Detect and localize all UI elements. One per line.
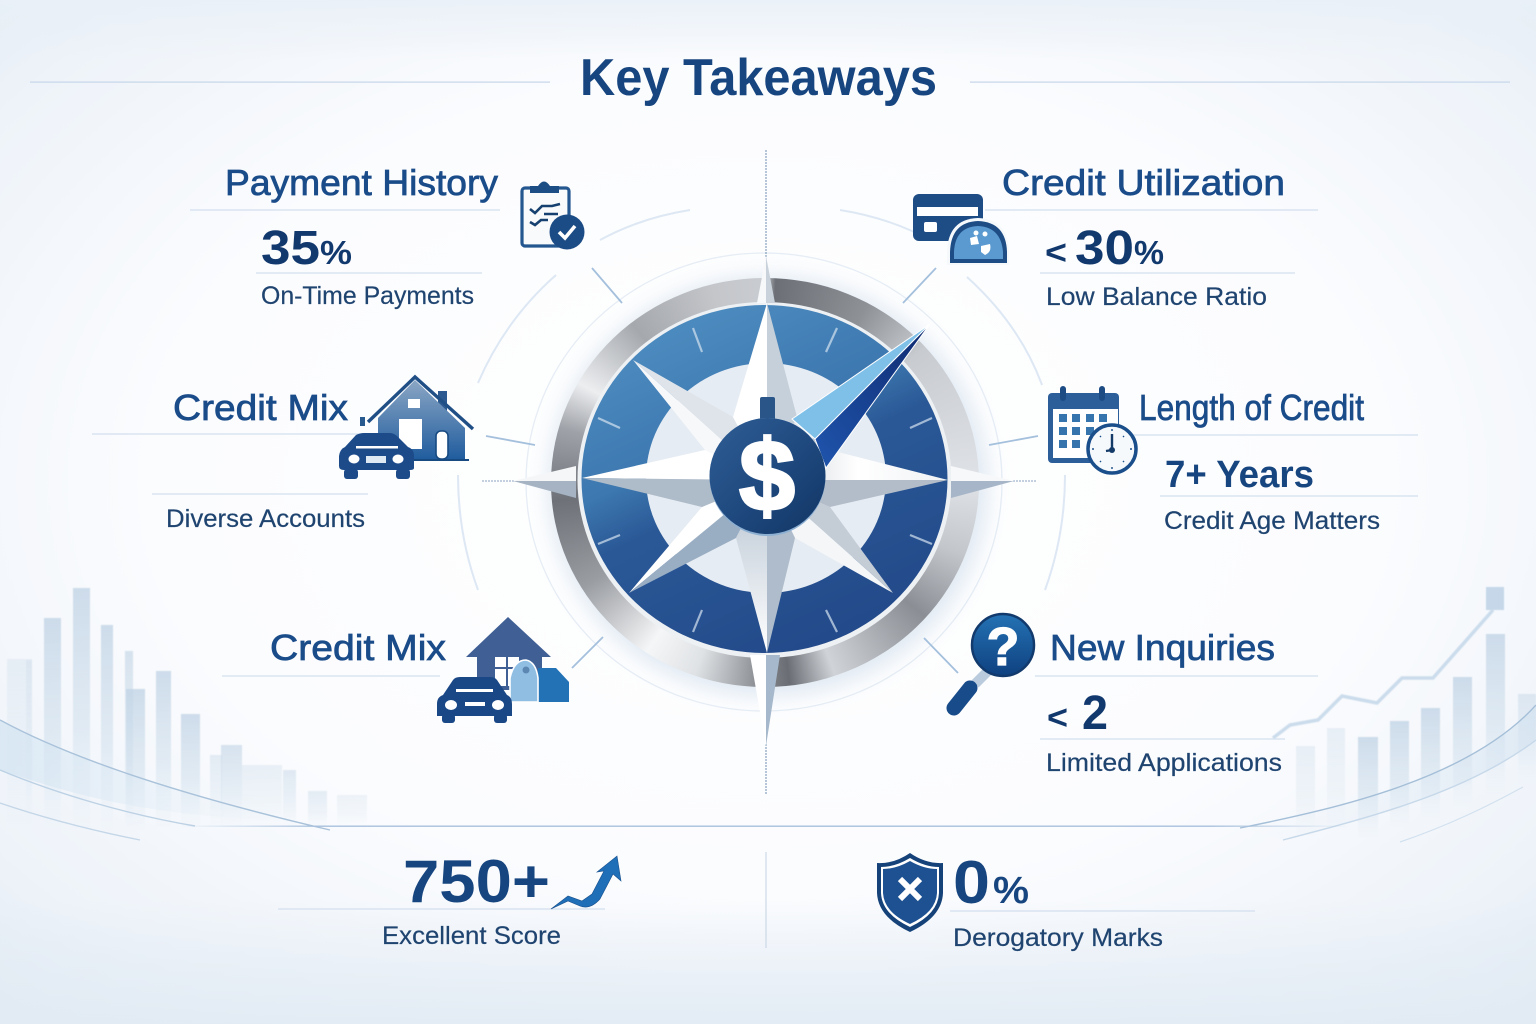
panel: credit mix upper: Diverse Accounts bbox=[166, 505, 365, 533]
panel: new inquiries: Limited Applications bbox=[1046, 749, 1282, 777]
icon: house, car, lock and folder bbox=[437, 617, 569, 723]
needle bbox=[792, 324, 930, 468]
panel: payment history: 35 bbox=[261, 222, 320, 275]
compass star outer spikes bbox=[513, 256, 1014, 746]
panel: length of credit bbox=[1048, 386, 1418, 535]
stat: 0% derogatory marks bbox=[877, 849, 1255, 952]
stat: 0% derogatory marks: 0 bbox=[953, 849, 990, 916]
stat: 750+ excellent score bbox=[278, 848, 621, 950]
panel: payment history bbox=[190, 162, 584, 310]
panel: credit utilization: Credit Utilization bbox=[1002, 162, 1285, 203]
panel: payment history: On-Time Payments bbox=[261, 282, 474, 310]
compass bbox=[513, 256, 1014, 746]
panel: payment history: % bbox=[320, 234, 352, 271]
panel: payment history: Payment History bbox=[225, 162, 498, 203]
panel: new inquiries bbox=[954, 614, 1318, 777]
blue dial band bbox=[578, 302, 952, 658]
panel: credit utilization: % bbox=[1134, 234, 1164, 271]
stat: 750+ excellent score: Excellent Score bbox=[382, 922, 561, 950]
panel: credit utilization: Low Balance Ratio bbox=[1046, 283, 1267, 311]
panel: length of credit: 7+ Years bbox=[1165, 454, 1314, 496]
hub: $ bbox=[739, 420, 795, 532]
panel: length of credit: Length of Credit bbox=[1139, 387, 1364, 428]
stat: 0% derogatory marks: % bbox=[993, 870, 1029, 912]
panel: credit mix lower: Credit Mix bbox=[270, 627, 446, 668]
icon: house and car bbox=[339, 377, 473, 479]
panel: new inquiries: 2 bbox=[1082, 687, 1108, 740]
compass star points bbox=[582, 303, 948, 653]
stat: 0% derogatory marks: Derogatory Marks bbox=[953, 924, 1163, 952]
icon: magnifier with question mark: ? bbox=[986, 617, 1020, 677]
icon: shield with x bbox=[877, 853, 943, 932]
title: Key Takeaways bbox=[580, 49, 937, 107]
background swoosh curves bbox=[0, 705, 1536, 842]
panel: new inquiries: New Inquiries bbox=[1050, 627, 1275, 668]
stat: 750+ excellent score: 750+ bbox=[403, 848, 550, 915]
panel: credit mix lower bbox=[222, 617, 569, 723]
icon: magnifier with question mark bbox=[954, 614, 1034, 708]
panel: credit utilization bbox=[913, 162, 1318, 311]
icon: clipboard check bbox=[522, 182, 584, 250]
panel: credit utilization: 30 bbox=[1075, 222, 1134, 275]
panel: credit utilization: < bbox=[1045, 234, 1067, 272]
panel: new inquiries: < bbox=[1047, 699, 1068, 737]
panel: length of credit: Credit Age Matters bbox=[1164, 507, 1380, 535]
icon: calendar and clock bbox=[1048, 386, 1136, 473]
compass guide arcs and ticks bbox=[458, 150, 1065, 795]
left background bar chart bbox=[7, 588, 367, 830]
panel: credit mix upper bbox=[92, 377, 473, 533]
right background chart bbox=[1273, 587, 1536, 837]
icon: credit card and gauge bbox=[913, 194, 1009, 265]
bottom divider bbox=[180, 826, 1350, 948]
hub bbox=[710, 397, 826, 536]
metal ring bbox=[551, 278, 979, 687]
icon: rising arrow bbox=[551, 856, 621, 909]
panel: credit mix upper: Credit Mix bbox=[173, 387, 348, 428]
